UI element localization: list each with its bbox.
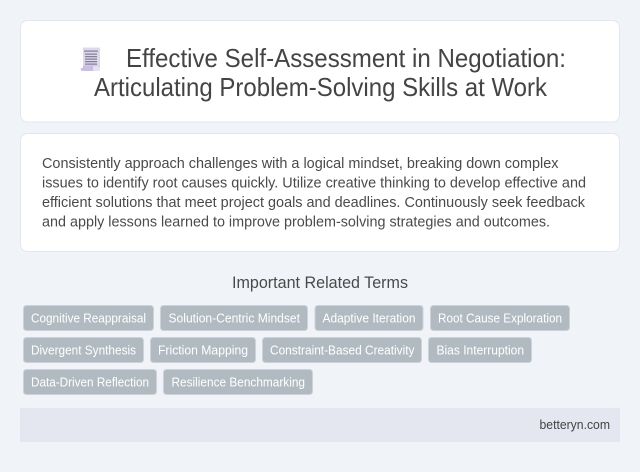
tag [315,306,423,330]
summary text: issues to identify root causes quickly. Utilize creative thinking to develop effective and [42,174,586,191]
panel: summary card [20,134,620,252]
summary text: efficient solutions that meet project goals and deadlines. Continuously seek feedback [42,194,585,211]
panel: title card [20,20,620,122]
title [94,45,566,102]
summary text: Consistently approach challenges with a logical mindset, breaking down complex [42,155,559,172]
footer bar [20,408,620,442]
tag [428,338,532,362]
tag [430,306,570,330]
tag: Data-Driven Reflection [31,374,149,390]
tag [24,370,156,394]
tag: Divergent Synthesis [31,342,136,358]
summary text: and apply lessons learned to improve problem-solving strategies and outcomes. [42,213,550,230]
tag: Friction Mapping [158,342,248,358]
icon: paper scroll [80,48,100,71]
tag [150,338,256,362]
tag: Constraint-Based Creativity [270,342,415,358]
tag [160,306,308,330]
tag: Bias Interruption [436,342,524,358]
tag: Root Cause Exploration [438,310,562,326]
tag: Cognitive Reappraisal [31,310,146,326]
tag [24,306,154,330]
tag [164,370,312,394]
tag [262,338,422,362]
title: Articulating Problem-Solving Skills at Work [94,74,547,102]
tag: Resilience Benchmarking [172,374,305,390]
tags: related terms [24,306,570,394]
tag [24,338,144,362]
title: Effective Self-Assessment in Negotiation: [126,45,566,73]
tag: Solution-Centric Mindset [168,310,300,326]
footer site name: betteryn.com [540,418,610,432]
tag: Adaptive Iteration [322,310,416,326]
summary text [42,155,586,230]
heading: related terms: Important Related Terms [232,274,408,292]
